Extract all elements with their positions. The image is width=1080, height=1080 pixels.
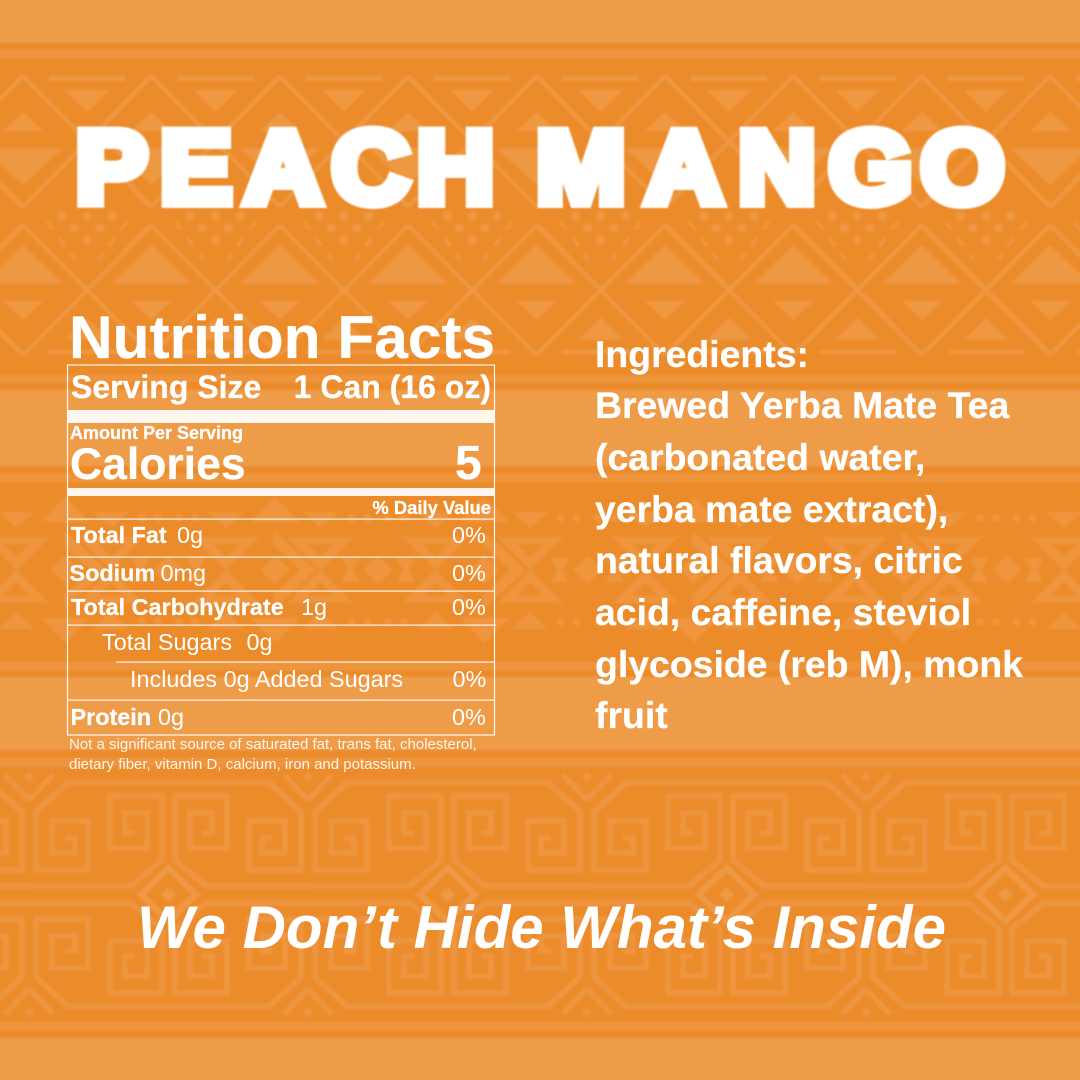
row: serving size: 1 Can (16 oz): [294, 369, 491, 405]
pattern: stripe below upper strip: [0, 474, 1080, 482]
pattern: hourglass and diamond row: [0, 490, 1080, 650]
title: PEACH MANGO: [76, 111, 1004, 225]
row: total carbohydrate: [71, 594, 486, 620]
pattern: stripe above key border: [0, 758, 1080, 767]
band: top light stripe: [0, 0, 1080, 43]
text block: ingredients: [595, 333, 1023, 736]
row: protein: 0g: [158, 704, 184, 730]
row: protein: 0%: [452, 704, 486, 730]
row: total carbohydrate: 0%: [452, 594, 486, 620]
text block: ingredients: Ingredients:: [595, 333, 809, 375]
row: total sugars: Total Sugars: [102, 629, 232, 655]
row: serving size: Serving Size: [71, 369, 261, 405]
row: serving size: [71, 369, 491, 405]
row: sodium: [70, 560, 486, 586]
text block: ingredients: fruit: [595, 694, 668, 736]
text block: ingredients: Brewed Yerba Mate Tea: [595, 384, 1010, 426]
row: added sugars: Includes 0g Added Sugars: [130, 666, 403, 692]
row: calories: Calories: [70, 440, 246, 489]
footnote: dietary fiber, vitamin D, calcium, iron and potassium.: [69, 756, 416, 773]
row: sodium: Sodium: [70, 560, 155, 586]
pattern: greek key lower row: [0, 868, 1080, 1017]
band: lower light strip: [0, 677, 1080, 750]
row: calories: [70, 437, 482, 490]
row: calories: 5: [455, 437, 482, 490]
row: total fat: Total Fat: [71, 522, 167, 548]
pattern: stripe below key border: [0, 1022, 1080, 1031]
text block: ingredients: (carbonated water,: [595, 436, 925, 478]
row: total fat: [71, 522, 486, 548]
panel: nutrition facts: [68, 303, 496, 773]
row: added sugars: 0%: [452, 666, 486, 692]
heading: nutrition facts: Nutrition Facts: [69, 303, 495, 371]
text block: ingredients: yerba mate extract),: [595, 488, 948, 530]
text block: ingredients: acid, caffeine, steviol: [595, 591, 971, 633]
pattern: greek key upper row: [0, 772, 1080, 921]
band: bottom light stripe: [0, 1038, 1080, 1080]
band: upper light strip: [0, 390, 1080, 466]
row: total carbohydrate: 1g: [301, 594, 327, 620]
row: total sugars: 0g: [246, 629, 273, 655]
row: sodium: 0%: [452, 560, 486, 586]
tagline: We Don’t Hide What’s Inside: [137, 894, 946, 961]
pattern: stripe above lower strip: [0, 662, 1080, 670]
row: protein: Protein: [70, 704, 151, 730]
header: percent daily value: % Daily Value: [372, 497, 491, 518]
pattern: stripe above middle band: [0, 375, 1080, 382]
row: protein: [70, 704, 486, 730]
footnote: Not a significant source of saturated fat, trans fat, cholesterol,: [69, 736, 477, 753]
row: total fat: 0g: [177, 522, 203, 548]
text block: ingredients: natural flavors, citric: [595, 539, 963, 581]
row: sodium: 0mg: [160, 560, 206, 586]
pattern: triangle and diamond lattice: [0, 70, 1080, 360]
text block: ingredients: glycoside (reb M), monk: [595, 643, 1023, 685]
footnote: [69, 736, 477, 773]
row: total fat: 0%: [452, 522, 486, 548]
row: total carbohydrate: Total Carbohydrate: [71, 594, 284, 620]
table frame and rules: [68, 365, 496, 735]
row: amount per serving: Amount Per Serving: [70, 423, 243, 443]
pattern: stripe under top band: [0, 50, 1080, 58]
